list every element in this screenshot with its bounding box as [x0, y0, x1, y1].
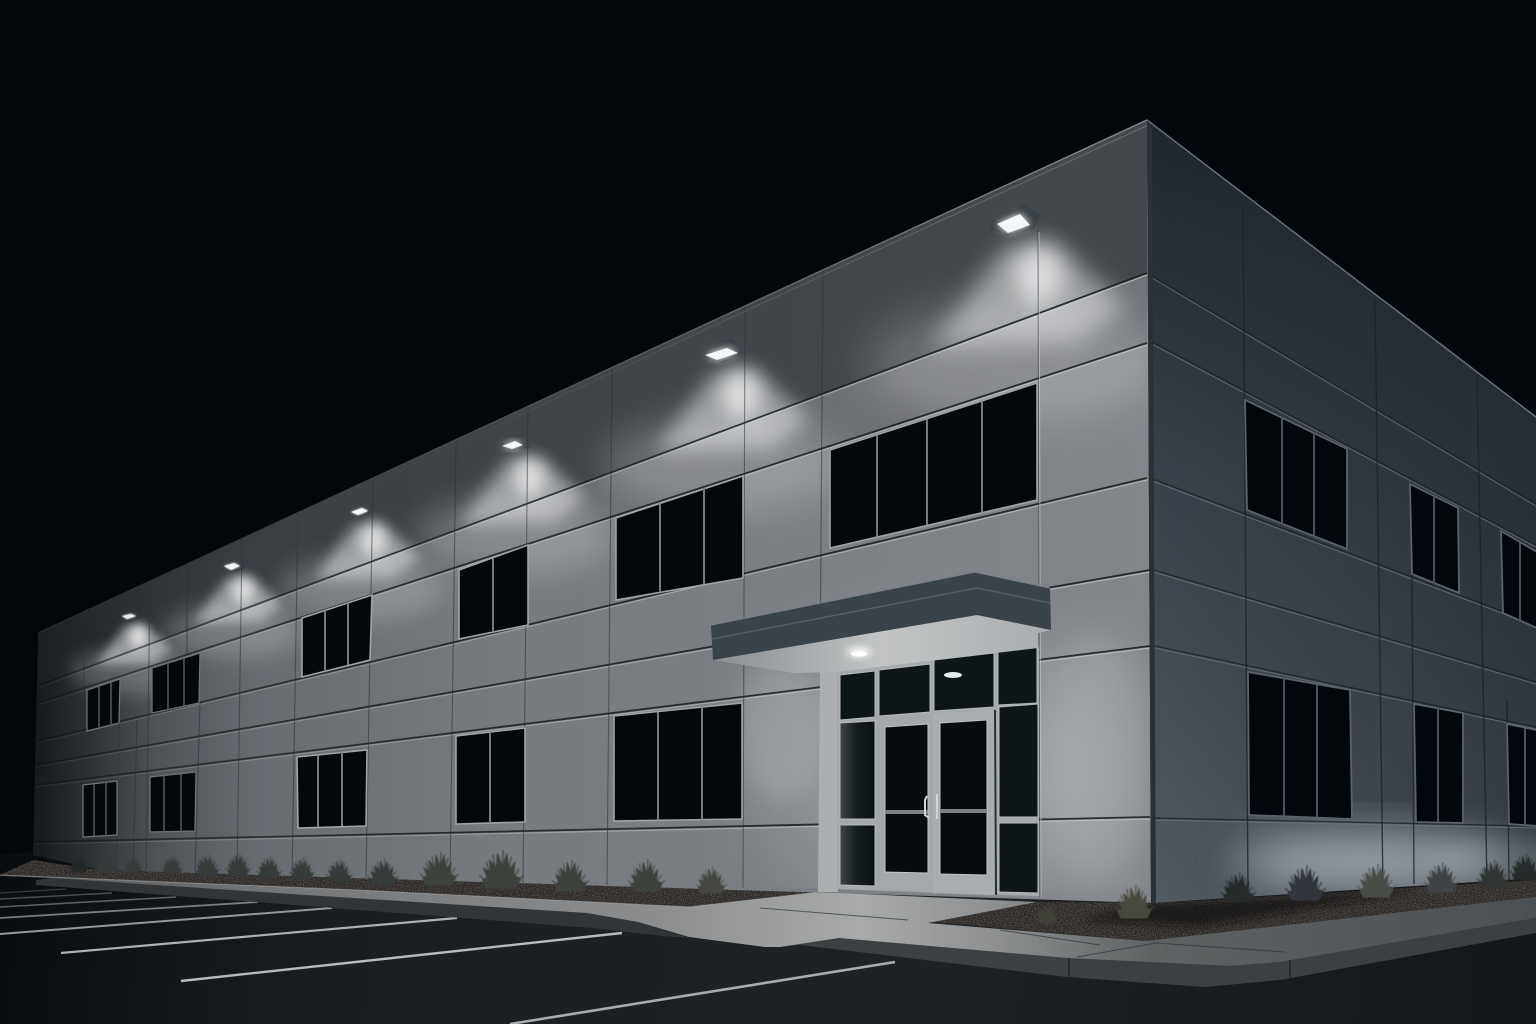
left window lower 3: [297, 750, 367, 828]
mulch bed right: [933, 880, 1536, 941]
right facade window upper 3: [1501, 531, 1536, 628]
sidelight glass: [840, 704, 1038, 893]
shrubs right bed: [1036, 854, 1536, 923]
left window upper 1: [830, 383, 1037, 548]
building corner shadow: [1147, 120, 1156, 903]
canopy soffit: [713, 615, 1051, 673]
wall lamp 3: [500, 435, 531, 451]
reflected ceiling light: [944, 672, 962, 678]
double doors: [878, 710, 996, 895]
curb left: [36, 878, 689, 938]
left window upper 3: [459, 545, 528, 639]
wall lamp 4: [349, 503, 374, 518]
right facade: [1147, 120, 1536, 903]
curb right: [780, 918, 1536, 987]
canopy downlight: [847, 647, 871, 657]
right facade window lower 3: [1507, 724, 1536, 826]
left window lower 4: [150, 772, 196, 832]
mulch bed left: [0, 860, 819, 907]
left window upper 4: [302, 595, 372, 677]
right facade window upper 1: [1245, 400, 1347, 549]
left window upper 5: [152, 653, 200, 713]
roof edge trim left: [38, 120, 1148, 638]
wall lamp 6: [120, 610, 141, 622]
light pool lamp 1: [865, 242, 1165, 422]
light pool lamp 4: [278, 522, 442, 621]
left facade: [33, 120, 1165, 910]
right facade window lower 2: [1414, 704, 1463, 823]
far left ground shadow: [0, 852, 100, 878]
left window upper 6: [87, 679, 120, 731]
sidewalk and entry slab: [0, 875, 1536, 978]
light pool lamp 6: [70, 624, 188, 694]
light pool lamp 2: [602, 368, 842, 512]
right facade window lower 1: [1248, 672, 1352, 819]
entrance storefront: [837, 647, 1039, 896]
left window lower 1: [614, 703, 742, 821]
parking space lines: [0, 889, 895, 1024]
parking lot asphalt: [0, 870, 1536, 1024]
transom glass: [840, 647, 1037, 720]
left window lower 5: [83, 781, 117, 837]
shrubs left bed: [70, 850, 727, 893]
left window upper 2: [616, 476, 743, 600]
wall lamp 5: [222, 559, 246, 573]
light pool lamp 5: [163, 575, 301, 658]
wall lamp 1: [990, 204, 1040, 236]
wall lamp 2: [700, 338, 744, 363]
light pool lamp 3: [416, 456, 612, 574]
left window lower 2: [456, 728, 525, 824]
right facade window upper 2: [1410, 484, 1459, 593]
canopy fascia: [711, 572, 1051, 660]
entry pillar: [818, 670, 838, 892]
